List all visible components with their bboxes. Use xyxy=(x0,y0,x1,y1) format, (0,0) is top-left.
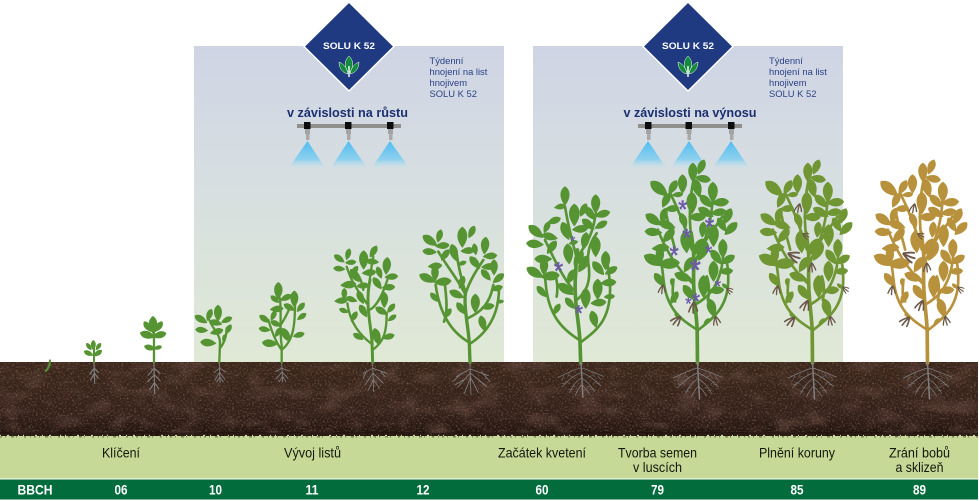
BBCH codes: 12 xyxy=(416,482,430,498)
text: weekly foliar feeding, left: Týdenní xyxy=(430,55,464,66)
diamond badge: left xyxy=(304,2,394,91)
stage labels: Zrání bobů xyxy=(889,444,950,460)
heading: yield: v závislosti na výnosu xyxy=(624,106,756,120)
root: BBCH 85 xyxy=(788,362,836,399)
seedling two xyxy=(139,316,167,394)
stage labels: Začátek kvetení xyxy=(498,444,586,460)
BBCH codes: 85 xyxy=(790,482,804,498)
soil layer xyxy=(0,362,978,436)
BBCH codes: 11 xyxy=(306,482,319,498)
text: weekly foliar feeding, right: Týdenní xyxy=(769,55,803,66)
text: weekly foliar feeding, left: hnojivem xyxy=(430,77,467,88)
text: weekly foliar feeding, left xyxy=(430,55,488,99)
plant: BBCH 85 crown filling xyxy=(757,158,855,363)
plant: BBCH 12 xyxy=(417,224,506,395)
heading: growth: v závislosti na růstu xyxy=(287,106,408,120)
BBCH codes: 89 xyxy=(913,482,926,498)
BBCH scale bar xyxy=(0,480,978,500)
stage labels: Plnění koruny xyxy=(759,444,835,460)
root: BBCH 79 xyxy=(674,362,722,399)
plant: BBCH 89 ripening xyxy=(872,158,970,363)
plant: BBCH 11 xyxy=(258,282,308,382)
text: weekly foliar feeding, left: hnojení na list xyxy=(430,66,488,77)
stage labels: v luscích xyxy=(633,459,682,475)
stage labels: a sklizeň xyxy=(896,459,944,475)
plant: BBCH 10 xyxy=(193,305,233,383)
BBCH codes: BBCH xyxy=(18,482,52,498)
text: weekly foliar feeding, right: hnojení na list xyxy=(769,66,827,77)
sprout xyxy=(46,360,50,371)
text: weekly foliar feeding, right: SOLU K 52 xyxy=(769,88,816,99)
sprayer boom: right xyxy=(629,122,750,169)
text: weekly foliar feeding, right: hnojivem xyxy=(769,77,807,88)
panel: growth-dependent foliar feeding xyxy=(194,46,504,363)
seedling one xyxy=(83,340,103,383)
BBCH codes: 10 xyxy=(209,482,222,498)
text: weekly foliar feeding, left: SOLU K 52 xyxy=(430,88,477,99)
text: weekly foliar feeding, right xyxy=(769,55,827,99)
sprayer boom: left xyxy=(288,122,410,169)
diamond badge: right: SOLU K 52 xyxy=(662,41,714,51)
soil crumb edge xyxy=(0,434,978,437)
diamond badge: right xyxy=(643,2,733,91)
stage labels: Tvorba semen xyxy=(618,444,697,460)
plants: germination stage (06) xyxy=(46,316,167,394)
stage labels: Klíčení xyxy=(102,444,140,460)
BBCH codes: 79 xyxy=(651,482,664,498)
green stage band xyxy=(0,436,978,478)
stage labels xyxy=(102,444,950,475)
panel: yield-dependent foliar feeding xyxy=(533,46,843,363)
BBCH codes xyxy=(18,482,926,498)
plant: BBCH 60 flowering start xyxy=(524,186,619,363)
root: BBCH 60 xyxy=(558,362,604,397)
plant: BBCH 11 tall xyxy=(332,244,398,392)
diamond badge: left: SOLU K 52 xyxy=(323,41,375,51)
BBCH codes: 60 xyxy=(536,482,549,498)
BBCH codes: 06 xyxy=(114,482,128,498)
root: BBCH 89 xyxy=(904,362,952,399)
stage labels: Vývoj listů xyxy=(284,444,341,460)
plant: BBCH 79 pod formation xyxy=(642,158,740,363)
